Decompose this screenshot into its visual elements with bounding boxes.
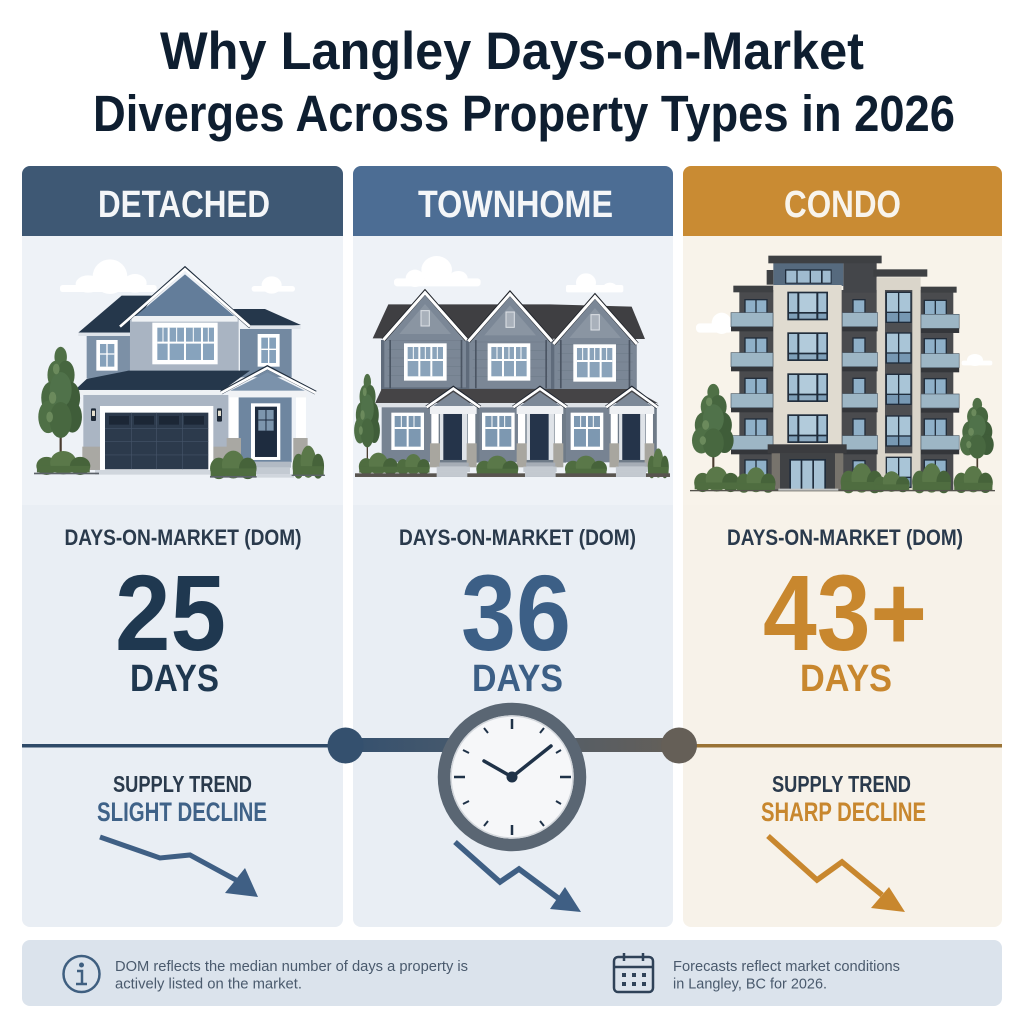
lower roof: [75, 371, 250, 390]
header: detached: DETACHED: [98, 184, 270, 226]
supply trend: detached: [97, 771, 267, 827]
supply trend: condo: SUPPLY TREND: [772, 771, 911, 797]
clouds: [60, 259, 295, 294]
arrow: townhome decline: [455, 842, 581, 912]
days label: condo: DAYS: [800, 658, 892, 700]
header: townhome: [353, 166, 673, 236]
supply trend: condo: [761, 771, 926, 827]
upper windows: [152, 323, 218, 364]
lamps: [91, 408, 96, 421]
timeline connector: [22, 728, 1002, 764]
header: condo: [683, 166, 1002, 236]
side bays: [744, 299, 768, 317]
garage: [100, 406, 213, 470]
dom label: townhome: DAYS-ON-MARKET (DOM): [399, 525, 636, 550]
footnote: DOM definition: actively listed on the market.: [115, 976, 302, 992]
footnote: forecasts: Forecasts reflect market conditions: [673, 958, 900, 975]
arrow: detached slight decline: [100, 837, 258, 897]
clouds: [696, 313, 992, 366]
dom label: condo: DAYS-ON-MARKET (DOM): [727, 525, 963, 550]
panel: detached: [22, 166, 343, 927]
porch: [238, 397, 292, 462]
dom value: detached: 25: [115, 552, 226, 673]
icon: detached house: [34, 259, 325, 479]
days label: detached: DAYS: [130, 658, 219, 700]
panel: townhome: [353, 166, 673, 927]
supply trend: detached: SUPPLY TREND: [113, 771, 252, 797]
dom value: townhome: 36: [461, 552, 571, 673]
tree and shrubs: [38, 347, 82, 474]
balconies: [731, 313, 773, 331]
icon: calendar: [614, 953, 653, 992]
icon: clock: [444, 709, 580, 845]
footnote: forecasts: [673, 958, 900, 992]
lower wall: [83, 395, 228, 470]
panel: condo: [683, 166, 1002, 927]
header: townhome: TOWNHOME: [418, 184, 613, 226]
title: Why Langley Days-on-Market: [160, 22, 864, 81]
footer band: [22, 940, 1002, 1006]
footnote: DOM definition: [115, 958, 468, 992]
arrow: condo sharp decline: [768, 836, 905, 912]
footnote: DOM definition: DOM reflects the median number of days a property is: [115, 958, 468, 975]
dom label: detached: DAYS-ON-MARKET (DOM): [64, 525, 302, 550]
icon: townhomes: [354, 256, 670, 478]
entrance: [768, 444, 847, 453]
light towers: [773, 285, 842, 445]
trees and shrubs: [692, 384, 734, 486]
header: condo: CONDO: [784, 184, 901, 226]
title: [93, 22, 955, 142]
lower roof: [375, 389, 658, 403]
footnote: forecasts: in Langley, BC for 2026.: [673, 976, 827, 992]
header: detached: [22, 166, 343, 236]
supply trend: condo: SHARP DECLINE: [761, 797, 926, 827]
icon: info: [64, 956, 100, 992]
icon: condo building: [690, 256, 995, 493]
shrubs and tree: [354, 374, 380, 476]
clouds: [394, 256, 623, 292]
body: [739, 290, 953, 490]
supply trend: detached: SLIGHT DECLINE: [97, 797, 267, 827]
dom value: condo: 43+: [763, 552, 927, 673]
days label: townhome: DAYS: [472, 658, 563, 700]
